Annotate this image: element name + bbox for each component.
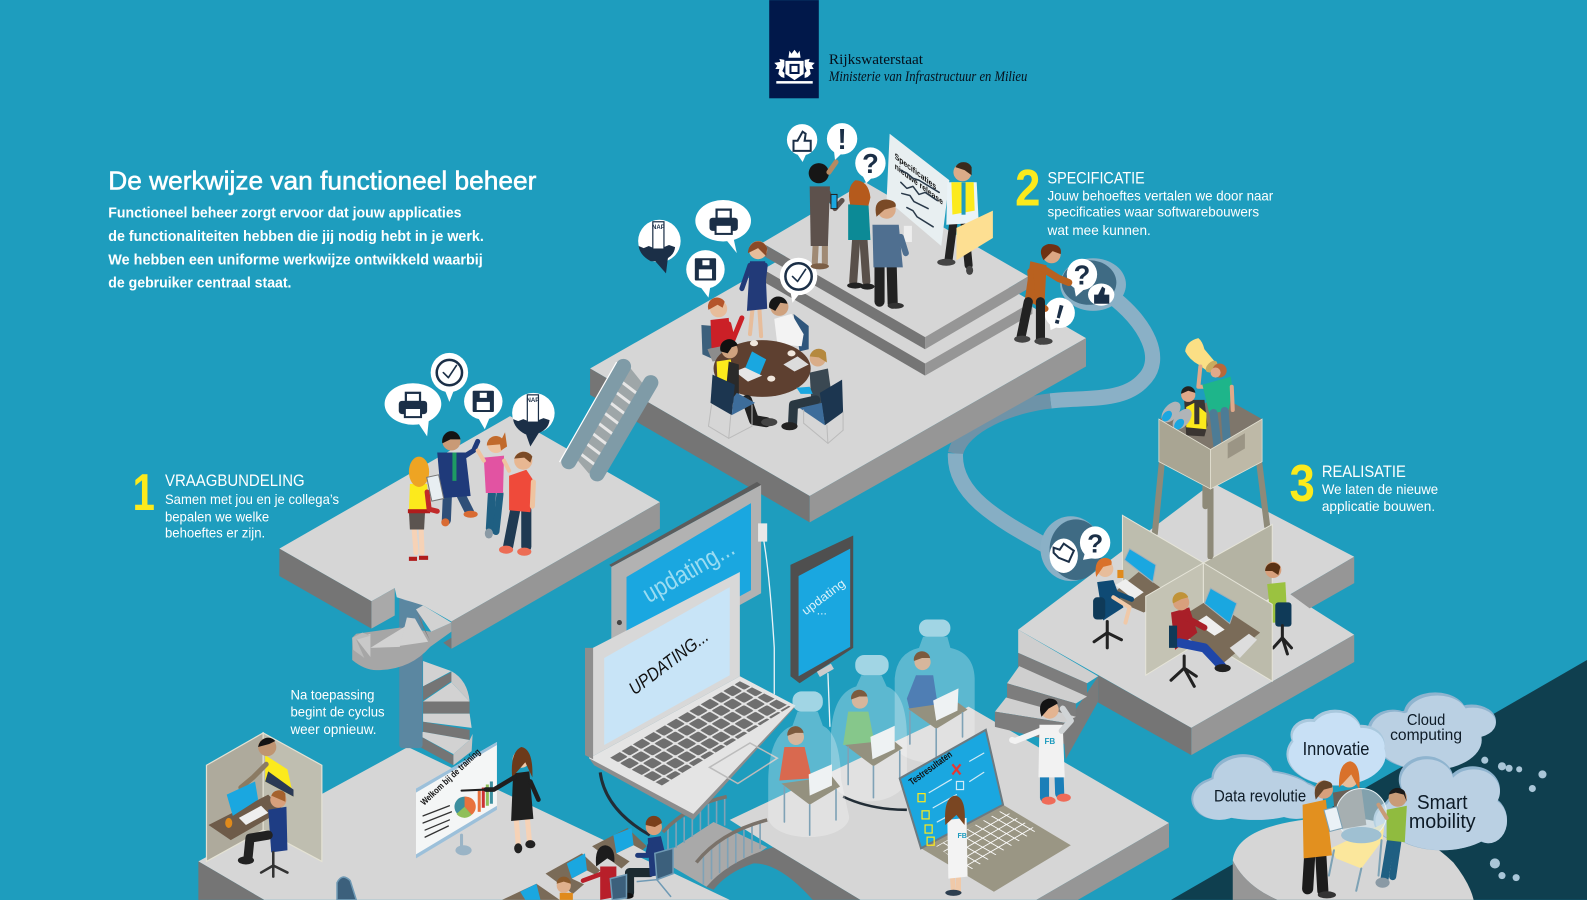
spiral staircase upper half [352,605,451,670]
speech bubble: question: ? [1074,260,1090,291]
thought cloud: smart mobility [1373,756,1507,850]
note: cycle restart: weer opnieuw. [290,722,377,738]
step 1 label [133,463,339,542]
person with binoculars [1158,386,1207,436]
laptop: UPDATING... [625,626,712,699]
person: FB woman at laptop: FB [957,832,967,840]
person: woman behind table [1333,761,1366,830]
thought cloud: data revolutie [1191,754,1323,820]
bar chart [478,781,493,812]
person: woman in teal [847,180,874,290]
platform 1: vraagbundeling [279,416,660,649]
thought cloud: innovatie [1286,710,1386,786]
bubble: floppy [464,383,503,429]
monitor left [1124,549,1156,582]
video call screen with FB person [241,738,294,797]
training board [416,742,497,858]
watchtower [1155,338,1267,557]
bubble: clock [431,353,468,402]
laptop on table [735,351,766,382]
platform 3: realisatie [995,483,1354,759]
bubble: ruler: NAP [526,398,539,404]
thought cloud: cloud computing: computing [1390,727,1462,744]
person: FB woman at laptop [945,796,968,896]
intro text: Functioneel beheer zorgt ervoor dat jouw applicaties [108,205,462,222]
intro text: We hebben een uniforme werkwijze ontwikkeld waarbij [108,251,483,268]
monitor centre [1204,588,1237,624]
pipe between step 2 and step 3 [955,294,1153,547]
person: standing woman in blue dress [742,241,767,336]
desk [208,795,283,840]
specification board group [809,134,993,309]
speech bubble: question: ? [1087,529,1103,559]
jar 1 with person [768,691,849,837]
magnifier: step 3 [1040,516,1110,581]
person: woman with phone [809,162,842,269]
person: green sweater [1265,562,1291,654]
step 1 label: VRAAGBUNDELING [165,472,305,490]
speech bubbles group 2 [638,123,886,303]
bubble: thumb [787,124,817,162]
person: scientist in white coat: FB [1045,737,1055,746]
monitor [227,781,258,816]
meeting table group [701,241,843,443]
person: man in blue jacket [437,431,478,526]
person: FB man in vest with chair [708,339,777,438]
person: woman in pink [478,432,509,539]
person: woman in green [1375,788,1407,888]
person: man in blue jacket with paper [872,200,912,309]
training board: Welkom bij de training [419,747,482,807]
speech bubbles group 1 [385,353,555,446]
person: seated man with chair [238,790,287,877]
bubble: printer [385,383,441,436]
logo: Rijkswaterstaat: Rijkswaterstaat [829,52,923,68]
speech bubble: exclamation: ! [1051,298,1068,331]
person with megaphone [1185,338,1233,446]
logo: Rijkswaterstaat: Ministerie van Infrastructuur en Milieu [828,69,1027,85]
bubble: floppy [686,250,725,298]
bubble: ruler [512,393,555,446]
intro text [108,205,484,292]
jar 3 with person [895,620,975,763]
note: cycle restart: begint de cyclus [290,705,385,721]
person: FB man holding folder [937,162,993,275]
person: man in red at desk [1169,592,1231,686]
person: man in white shirt [769,296,809,351]
thought cloud: data revolutie: Data revolutie [1214,788,1306,806]
tablet [609,482,761,676]
person: woman in red [583,845,627,900]
step 2 label: 2 [1015,159,1040,217]
step 3 label: 3 [1289,454,1315,512]
spiral staircase column [399,587,423,748]
intro text: de functionaliteiten hebben die jij nodig hebt in je werk. [108,228,484,245]
mug [1117,570,1123,578]
person: woman in yellow vest [408,457,444,561]
thought cloud: cloud computing [1367,692,1496,770]
step 2 label: wat mee kunnen. [1047,223,1151,239]
note: cycle restart: Na toepassing [290,687,374,703]
specification sheet: Specificaties [895,150,936,192]
step 3 label: applicatie bouwen. [1322,499,1435,515]
step 1 label: behoeftes er zijn. [165,526,265,542]
escalator [560,362,651,474]
magnifier: step 2 [1045,258,1126,331]
phone [790,536,853,683]
step 2 label: SPECIFICATIE [1048,169,1145,187]
step 1 label: bepalen we welke [165,509,269,525]
bridge between platforms [658,797,860,900]
bubble: ruler: NAP [652,225,665,231]
test results laptop: Testresultaten [907,749,955,788]
step 3 label: We laten de nieuwe [1322,482,1438,498]
phone: updating [799,576,848,618]
bubble: ruler [638,220,681,273]
people around crystal ball [1303,761,1407,898]
bubble: question: ? [862,148,879,179]
step 1 label: Samen met jou en je collega’s [165,492,339,508]
bubble: printer [695,200,751,253]
person: man in dark suit with chair [781,349,843,443]
keyboard [239,806,268,825]
jar 2 with person [831,655,907,801]
pie chart [454,797,476,818]
desk left [1108,572,1174,612]
people group: vraagbundeling [408,431,534,561]
person: man in red shirt [499,452,534,556]
logo: Rijkswaterstaat [769,0,1027,98]
bubble: exclamation: ! [837,124,847,156]
training desks with people [337,816,673,900]
person: scientist in white coat [1012,698,1071,805]
note: cycle restart [290,687,385,738]
cable to test laptop [843,797,907,810]
platform 2: specificatie [590,182,1086,522]
cubicle cross: realisatie [1093,492,1291,686]
table with yellow cloth [1331,823,1385,869]
upper tier of platform 2 [762,182,1032,376]
empty chair [337,877,356,900]
crystal ball [1336,789,1387,843]
speech bubble: hand [1050,539,1078,573]
step 1 label: 1 [133,463,155,521]
keyboard left [1115,579,1144,599]
label: smart mobility: mobility [1409,811,1477,833]
bubble: clock [780,258,817,303]
platform 5: lower left [198,747,730,900]
step 3 label [1289,454,1438,515]
spiral staircase lower half [418,661,473,765]
person: woman in red sweater [701,298,742,361]
person: man in orange jacket [1303,780,1342,898]
bubble: question [855,147,886,183]
thought cloud: cloud computing: Cloud [1407,712,1445,729]
desk rows [502,828,647,900]
laptops [520,828,647,900]
step 2 label: Jouw behoeftes vertalen we door naar [1048,189,1274,205]
person: man in blue [621,816,673,899]
person: woman at left desk [1093,558,1132,648]
label: smart mobility [1409,792,1477,833]
thought cloud: innovatie: Innovatie [1303,739,1369,759]
floating dots [1481,757,1547,881]
tablet: updating... [638,534,739,609]
person: man in orange [557,877,573,900]
cubicle: bottom left [206,733,322,877]
round platform [1233,817,1474,900]
specification sheet [887,134,949,246]
laptop [585,572,796,835]
cups [750,340,796,382]
step 2 label [1015,159,1274,239]
bubble: exclamation [827,123,857,160]
specification sheet: nieuwe release [895,160,943,207]
keyboard centre [1195,615,1225,636]
table [714,340,811,397]
step 2 label: specificaties waar softwarebouwers [1048,205,1259,221]
stairs to platform 3 [995,630,1098,759]
person: man at magnifier [1014,244,1069,345]
phone: ... [817,603,827,617]
test results laptop [900,730,1071,892]
icon: royal coat of arms [774,50,815,84]
tablet on table [783,356,809,372]
desk centre [1172,599,1260,666]
step 3 label: REALISATIE [1322,463,1406,481]
intro text: de gebruiker centraal staat. [108,275,291,292]
dark corner background [1171,660,1587,900]
charging cables [762,531,830,727]
person: presenter woman [462,747,538,853]
platform 4: lower centre [730,707,1169,900]
label: smart mobility: Smart [1417,792,1468,814]
speech bubble: thumb [1088,284,1114,306]
title: De werkwijze van functioneel beheer [108,165,537,195]
